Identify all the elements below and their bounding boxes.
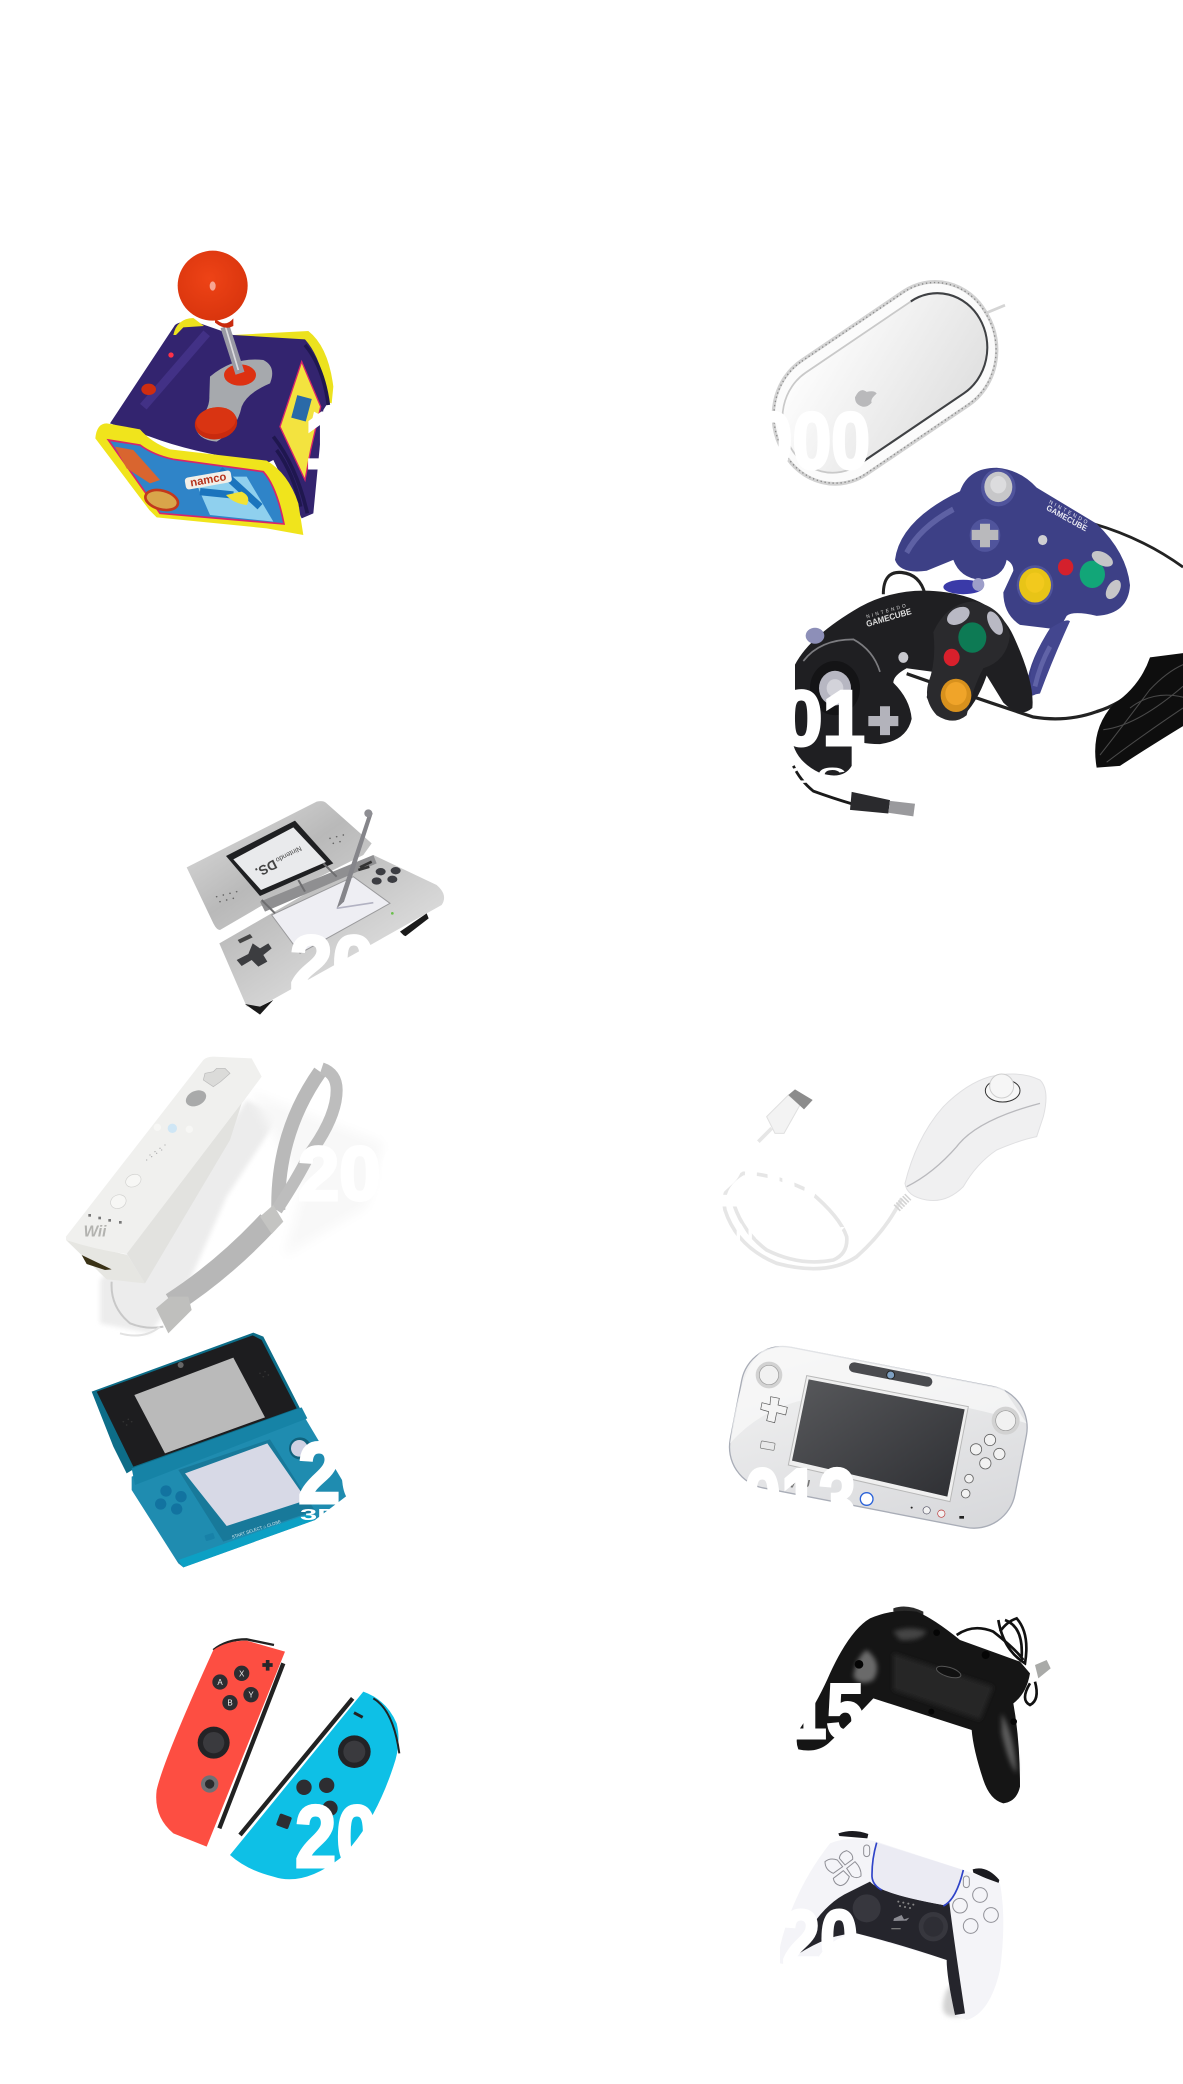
icon: Nintendo DS: [187, 801, 444, 1015]
year label: 2013: 2013: [706, 1450, 856, 1549]
icon: purple GameCube controller: NINTENDO: [1048, 499, 1090, 527]
year label: 2006 nunchuk: Nunchuk: [735, 1219, 846, 1246]
icon: Wii U gamepad: WiiU: [785, 1478, 811, 1490]
icon: Nintendo Switch Joy-Con pair: B: [227, 1699, 233, 1708]
icon: black GameCube controller with cable: [792, 572, 1183, 816]
year label: 2006 nunchuk: 2006: [706, 1137, 856, 1222]
year label: 2011: 3DS: [300, 1507, 361, 1524]
icon: black GameCube controller with cable: GAMECUBE: [865, 606, 913, 629]
icon: Wii remote with strap: [66, 1057, 383, 1336]
year label: 2004: 2004: [290, 919, 460, 1007]
year label: 2011: 2011: [298, 1426, 463, 1522]
year label: 2001: 2001: [695, 674, 865, 762]
icon: Nintendo 3DS: START SELECT ⌂ CLOSE: [231, 1519, 282, 1540]
icon: Wii remote with strap: Wii: [84, 1224, 107, 1241]
icon: Wii U gamepad: [722, 1339, 1034, 1535]
icon: Apple Pro mouse: [751, 257, 1019, 508]
year label: 2006 remote: 2006: [298, 1132, 463, 1217]
year label: 1999: 1999: [305, 396, 460, 485]
icon: Nintendo Switch Joy-Con pair: X: [239, 1669, 245, 1678]
year label: 2001: GC: [786, 763, 846, 788]
icon: Namco plug and play joystick: [95, 251, 333, 535]
icon: Namco plug and play joystick: namco: [189, 471, 227, 489]
icon: Wii nunchuk: [724, 1074, 1046, 1269]
icon: Nintendo Switch Joy-Con pair: A: [217, 1678, 223, 1687]
year label: 2015: 2015: [714, 1667, 864, 1755]
icon: PlayStation 5 DualSense controller: [780, 1831, 1003, 2020]
icon: purple GameCube controller: GAMECUBE: [1045, 503, 1089, 534]
icon: Nintendo 3DS: [92, 1333, 350, 1567]
icon: Nintendo DS: NintendoDS.: [253, 843, 306, 880]
year label: 2000: 2000: [715, 396, 870, 485]
icon: Nintendo Switch Joy-Con pair: Y: [248, 1691, 254, 1700]
icon: Nintendo Switch Joy-Con pair: [156, 1639, 399, 1879]
icon: black GameCube controller with cable: NINTENDO: [866, 602, 909, 620]
icon: Nintendo Switch Pro controller: [797, 1606, 1051, 1803]
icon: purple GameCube controller: [895, 468, 1183, 696]
year label: 2020: 2020: [706, 1894, 858, 1985]
year label: 2017: 2017: [295, 1787, 460, 1886]
